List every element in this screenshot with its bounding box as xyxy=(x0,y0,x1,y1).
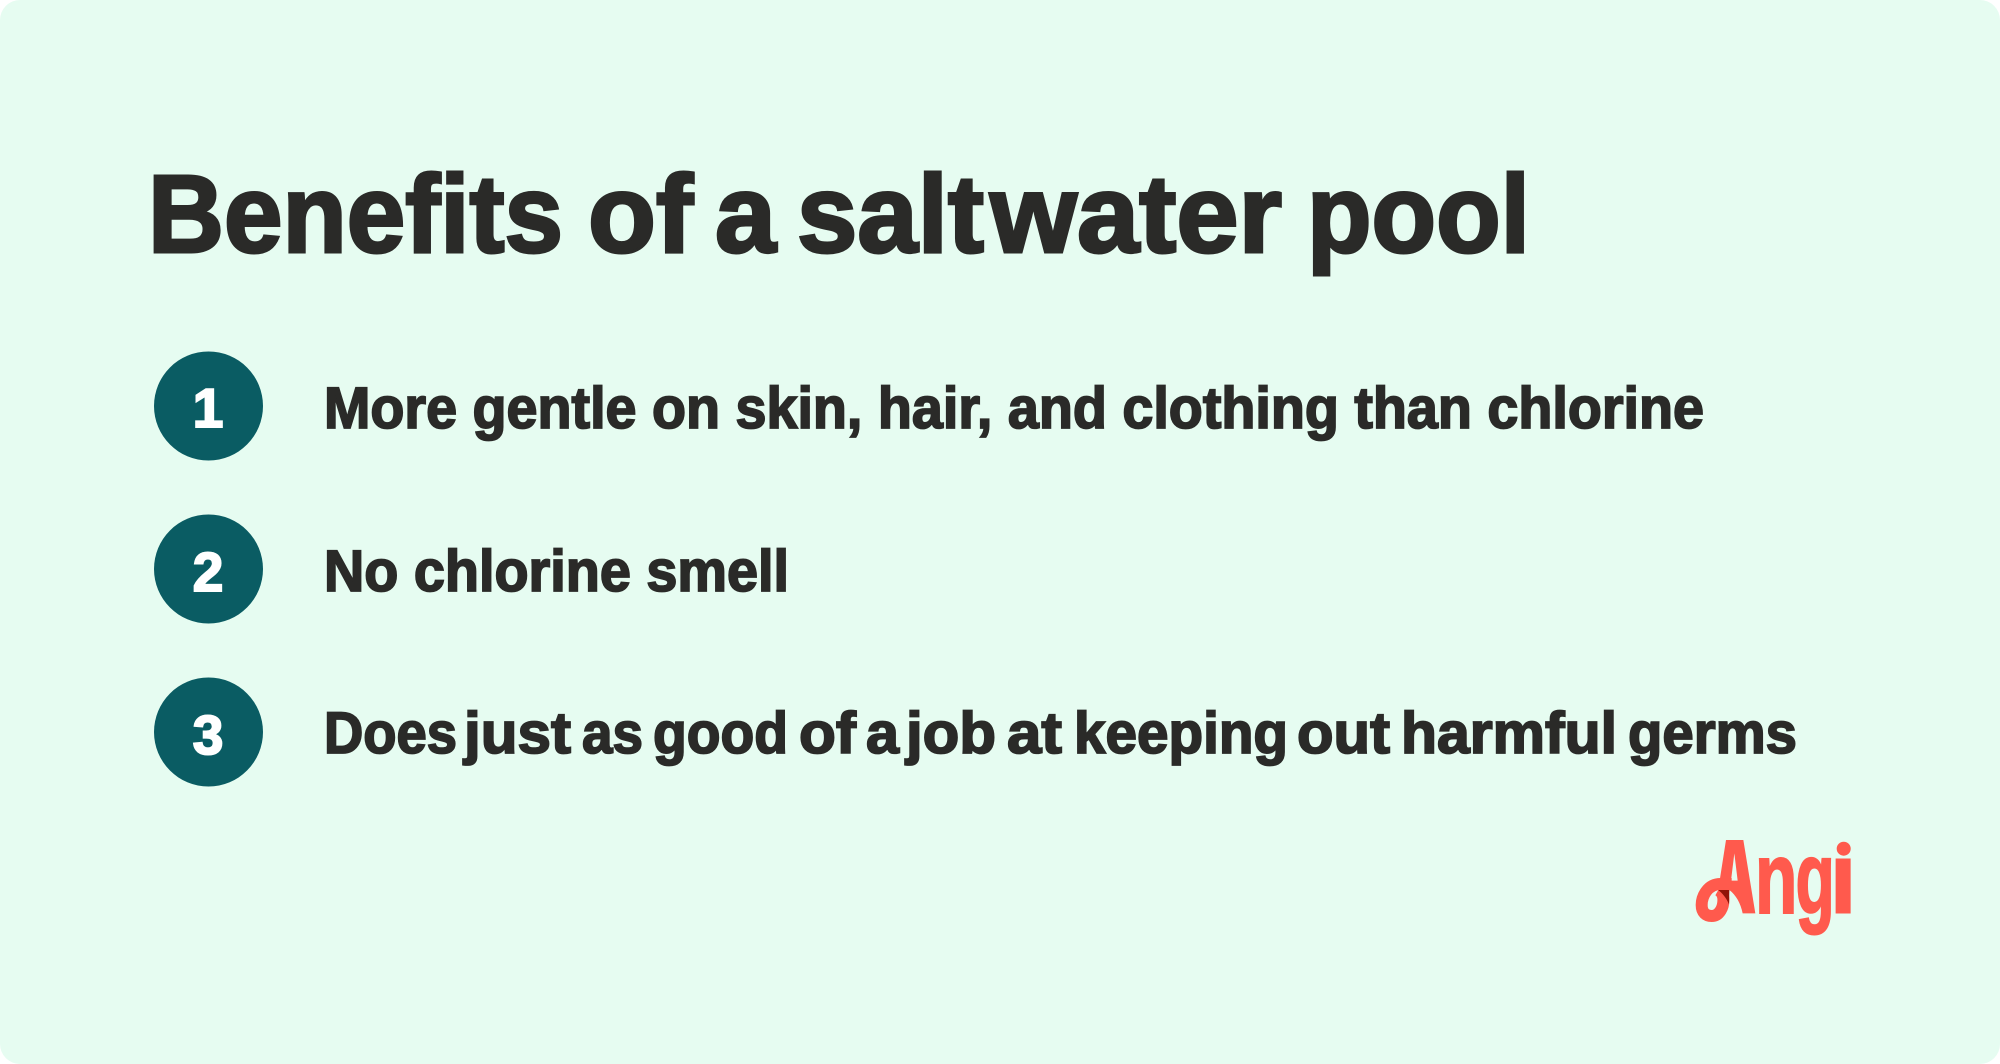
number badge 1: 1 xyxy=(193,377,223,439)
logo letter g: g xyxy=(1796,822,1835,936)
benefit text 3: out xyxy=(1297,701,1390,766)
benefit text 3: Does xyxy=(324,701,457,766)
logo letter n: n xyxy=(1755,822,1797,935)
benefit text 3: keeping xyxy=(1074,701,1288,766)
list item 2 xyxy=(154,514,789,624)
title: a xyxy=(715,153,777,276)
benefit text 3: good xyxy=(653,701,788,766)
benefit text 3: harmful xyxy=(1401,701,1617,766)
benefit text 3: a xyxy=(866,701,900,766)
benefit text 1: More gentle on skin, hair, and clothing than chlorine xyxy=(324,376,1704,441)
benefit text 3: germs xyxy=(1628,701,1797,766)
benefit text 3: of xyxy=(799,701,857,766)
benefit text 2: No chlorine smell xyxy=(324,539,789,604)
benefit text 3 xyxy=(324,701,1797,766)
number badge 3: 3 xyxy=(193,704,223,766)
title: Benefits xyxy=(148,153,563,276)
logo: Angi xyxy=(1702,821,1857,936)
logo letter i: i xyxy=(1829,821,1857,935)
benefit text 3: just xyxy=(463,701,571,766)
logo i dot mask xyxy=(1832,832,1856,857)
benefit text 3: job xyxy=(905,701,996,766)
number badge 2: 2 xyxy=(193,541,223,603)
title: salt xyxy=(797,153,984,276)
logo A swash shape xyxy=(1702,840,1755,916)
benefit text 3: as xyxy=(582,701,643,766)
title: of xyxy=(588,153,693,276)
benefit text 3: at xyxy=(1007,701,1062,766)
number badge 2 xyxy=(154,514,263,624)
logo i dot xyxy=(1837,842,1851,856)
list item 1 xyxy=(154,352,1704,460)
number badge 3 xyxy=(154,678,263,786)
list item 3 xyxy=(154,678,1797,786)
title: pool xyxy=(1307,153,1530,276)
number badge 1 xyxy=(154,352,263,460)
title: water xyxy=(989,153,1282,276)
logo letter A (text under drawn swash): A xyxy=(1744,868,1750,924)
title xyxy=(148,153,1530,276)
